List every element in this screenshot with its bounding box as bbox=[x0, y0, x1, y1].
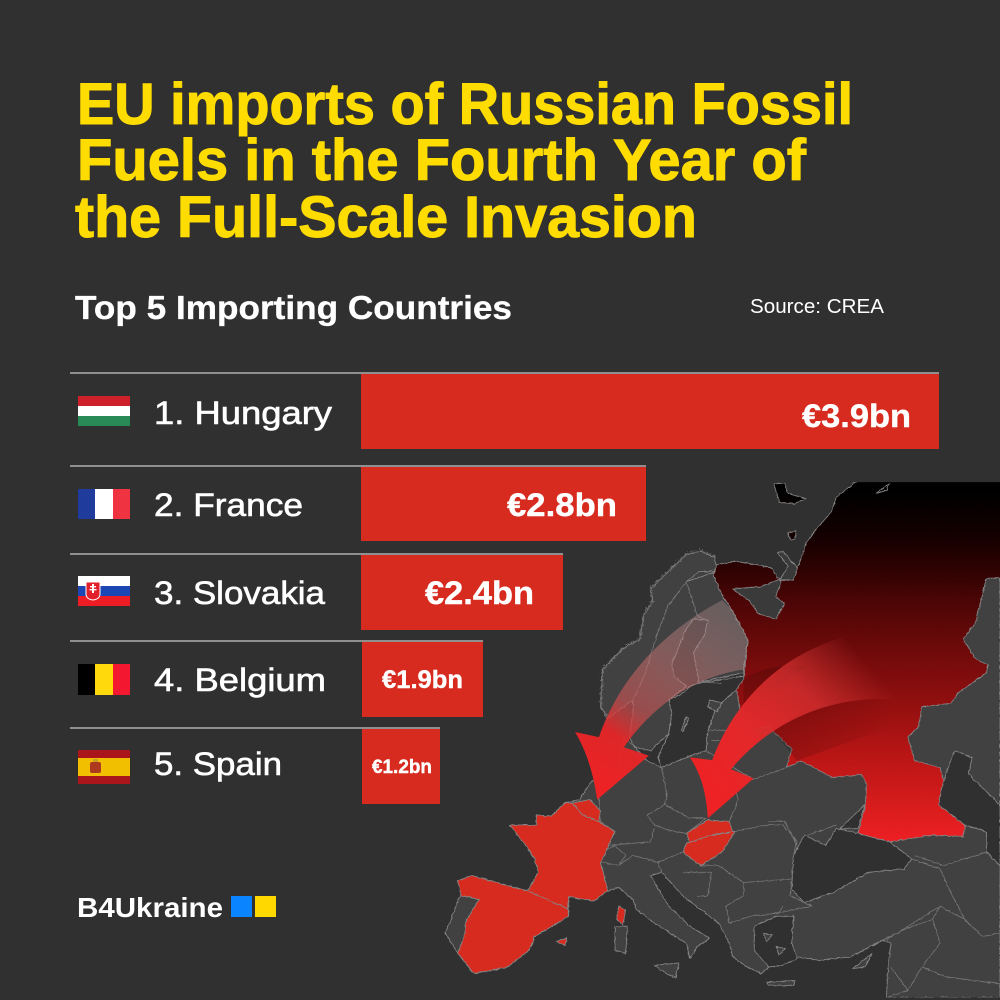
row: Slovakia bbox=[70, 553, 563, 630]
bar: Hungary bbox=[361, 374, 939, 449]
country: France bbox=[510, 803, 615, 908]
label: France: 2. France bbox=[154, 487, 303, 523]
flag: Slovakia bbox=[78, 576, 130, 606]
title: EU imports of Russian Fossil bbox=[77, 72, 853, 137]
logo mark: blue square bbox=[231, 896, 252, 917]
country: Slovakia bbox=[686, 820, 733, 844]
row: France bbox=[70, 465, 646, 541]
logo: B4Ukraine bbox=[77, 892, 276, 923]
logo mark: yellow square bbox=[255, 896, 276, 917]
bar: Spain bbox=[362, 729, 440, 804]
map of Europe bbox=[445, 480, 1000, 997]
label: Belgium: 4. Belgium bbox=[154, 662, 326, 698]
bar: Belgium bbox=[362, 642, 483, 717]
arrow: Russia to Hungary and Slovakia bbox=[690, 640, 881, 818]
label: Hungary: 1. Hungary bbox=[154, 395, 332, 431]
value: France: €2.8bn bbox=[507, 487, 617, 523]
Norwegian coast fine islands bbox=[601, 550, 715, 718]
source note: Source: CREA bbox=[750, 296, 885, 318]
value: Slovakia: €2.4bn bbox=[425, 575, 534, 611]
arrow: Russia to France and Belgium bbox=[575, 600, 748, 800]
title: Fuels in the Fourth Year of bbox=[77, 128, 807, 193]
label: Spain: 5. Spain bbox=[154, 746, 282, 782]
highlighted importing countries bbox=[458, 800, 735, 974]
flag: Belgium bbox=[78, 664, 130, 695]
value: Spain: €1.2bn bbox=[372, 757, 432, 778]
row: Hungary bbox=[70, 372, 939, 449]
arrow shading bbox=[773, 702, 864, 761]
title bbox=[75, 72, 853, 250]
country borders bbox=[599, 582, 1000, 997]
value: Hungary: €3.9bn bbox=[802, 398, 911, 434]
country: Spain bbox=[458, 876, 569, 974]
flag emblem: Slovak shield bbox=[86, 582, 100, 600]
flag: Hungary bbox=[78, 396, 130, 426]
land masses bbox=[445, 551, 1000, 997]
title: the Full-Scale Invasion bbox=[75, 185, 697, 250]
subtitle: Top 5 Importing Countries bbox=[75, 289, 512, 326]
flag: France bbox=[78, 489, 130, 519]
country: Hungary bbox=[683, 832, 735, 866]
label: Slovakia: 3. Slovakia bbox=[154, 575, 325, 611]
flag: Spain bbox=[78, 750, 130, 784]
value: Belgium: €1.9bn bbox=[382, 666, 463, 694]
row: Belgium bbox=[70, 640, 483, 717]
Corsica bbox=[617, 906, 626, 925]
seas bbox=[658, 676, 1000, 967]
Balearic islands bbox=[556, 938, 567, 946]
bar: France bbox=[361, 467, 646, 541]
bar: Slovakia bbox=[361, 555, 563, 630]
country: Belgium bbox=[572, 800, 601, 822]
Russia gradient region bbox=[713, 480, 1000, 842]
row: Spain bbox=[70, 727, 440, 804]
logo: B4Ukraine: B4Ukraine bbox=[77, 892, 223, 923]
